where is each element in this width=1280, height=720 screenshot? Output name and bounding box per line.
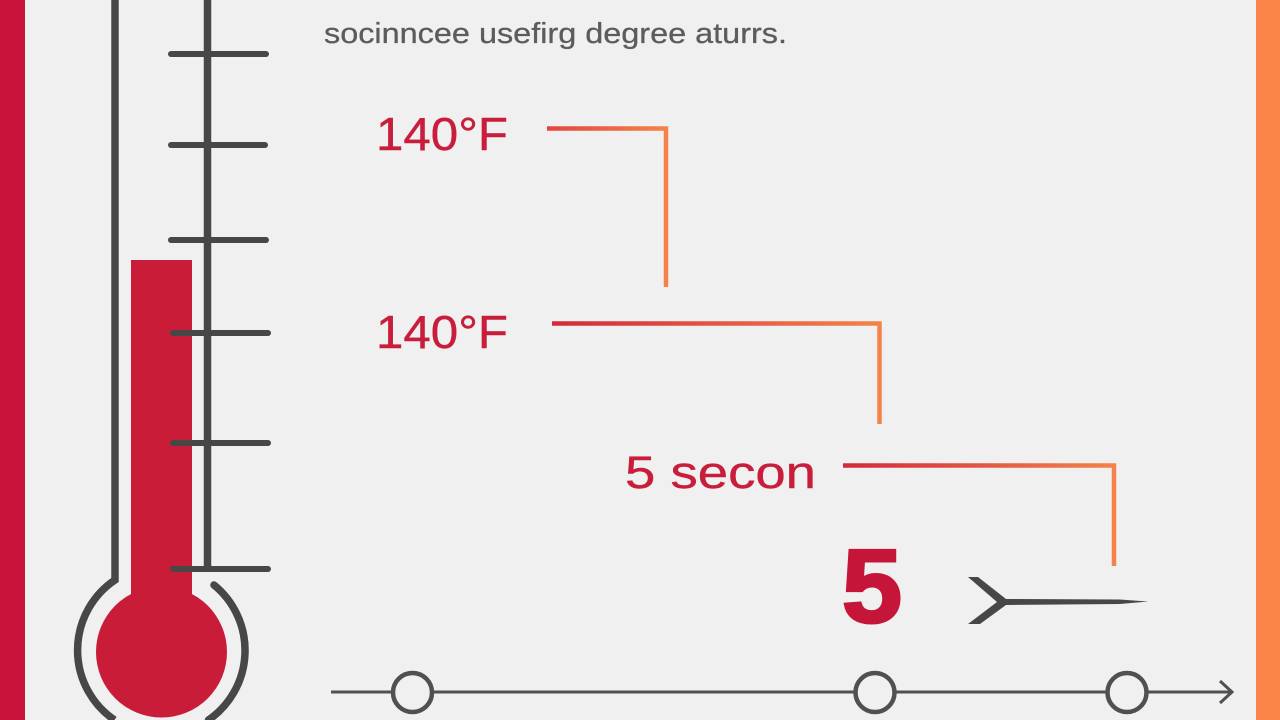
arrow glyph with forked tail xyxy=(968,577,1148,624)
thermometer red fill xyxy=(96,260,227,718)
connector: third step xyxy=(843,466,1114,566)
caption text: socinncee usefirg degree aturrs. xyxy=(324,18,787,50)
large numeral 5: 5 xyxy=(842,529,902,645)
timeline marker 2 xyxy=(856,673,894,712)
timeline marker 1 xyxy=(393,673,432,712)
timeline axis xyxy=(331,681,1232,703)
thermometer icon xyxy=(78,0,268,720)
connector: second step xyxy=(552,324,880,424)
thermometer outline xyxy=(78,0,245,720)
timeline with markers xyxy=(331,673,1232,712)
left border band xyxy=(0,0,25,720)
thermometer tick marks xyxy=(171,54,268,569)
label: first 140°F: 140°F xyxy=(376,108,508,160)
connector: first step xyxy=(547,128,666,287)
label: 5 secon: 5 secon xyxy=(625,447,816,498)
label: second 140°F: 140°F xyxy=(376,306,508,358)
timeline marker 3 xyxy=(1108,673,1146,712)
right border band xyxy=(1256,0,1280,720)
